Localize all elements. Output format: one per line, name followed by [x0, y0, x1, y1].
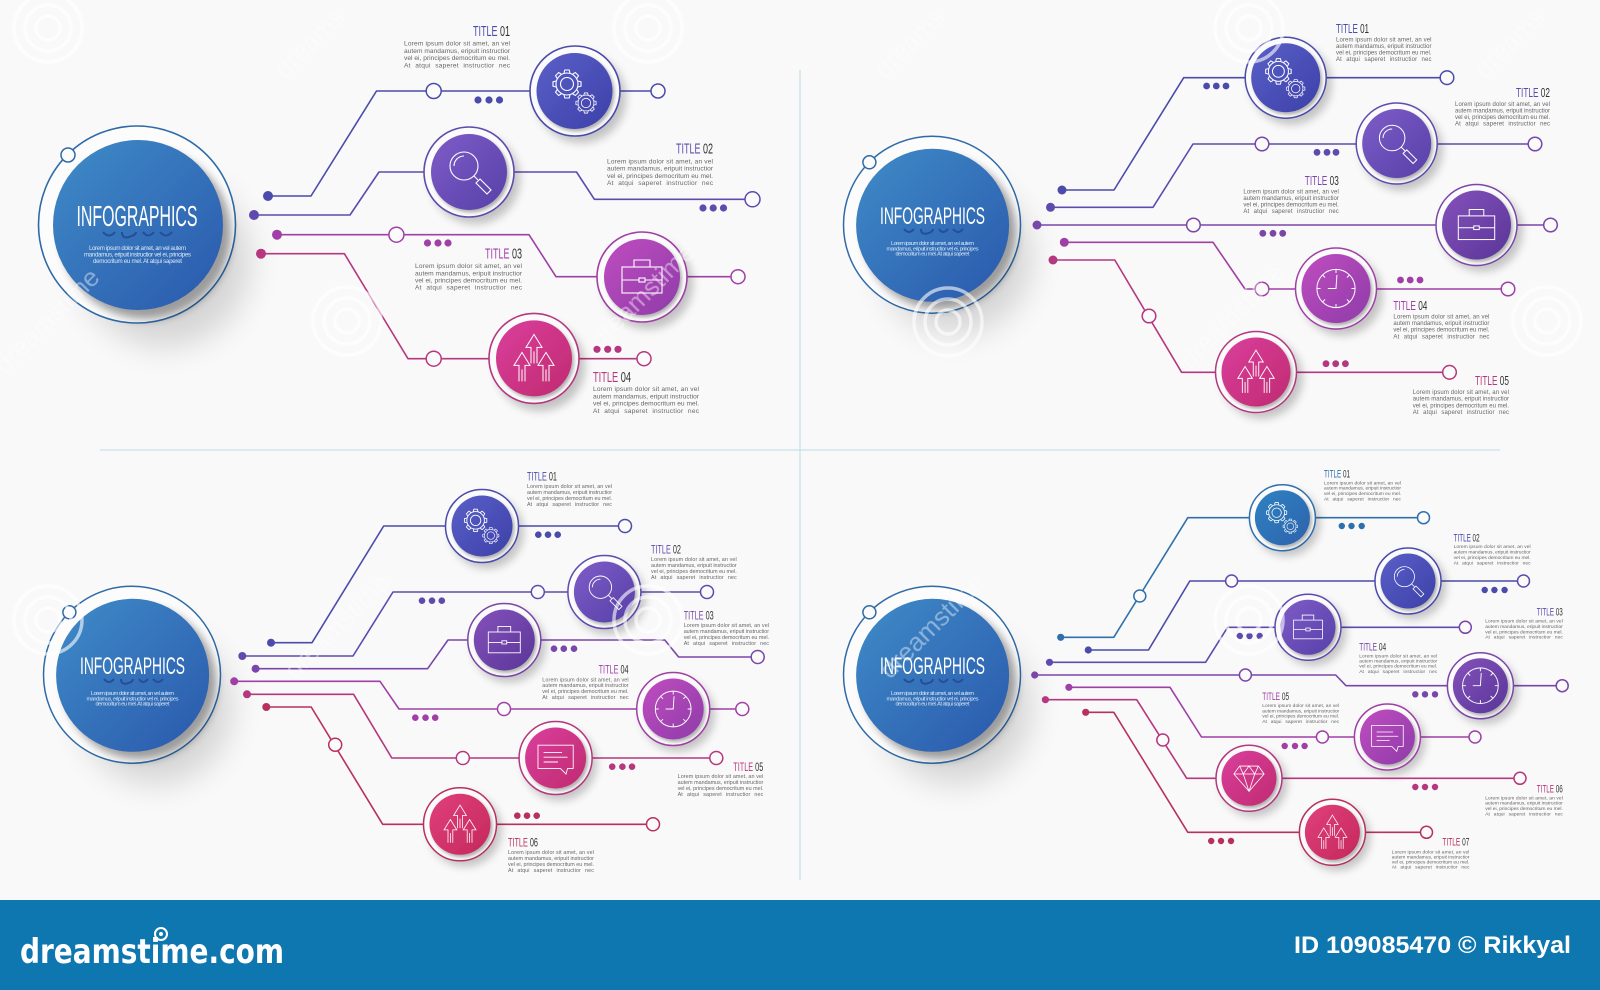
branch 01: vel ei, principes democritum eu mel. [404, 55, 510, 62]
branch 05 [243, 690, 764, 800]
footer banner [0, 900, 1600, 990]
branch 04: vel ei, principes democritum eu mel. [593, 400, 699, 408]
branch 03: autem mandamus, eripuit instructior [1485, 624, 1563, 630]
branch 02: Lorem ipsum dolor sit amet, an vel [607, 158, 714, 166]
branch 01 [263, 24, 665, 201]
branch 04: TITLE 04 [1393, 298, 1427, 313]
branch 04: autem mandamus, eripuit instructior [542, 683, 629, 689]
hub circle [38, 126, 250, 347]
watermarks: dreamstime [873, 567, 990, 684]
branch 04: Lorem ipsum dolor sit amet, an vel [542, 677, 629, 683]
branch 05: TITLE 05 [1262, 691, 1289, 703]
branch 05: At atqui saperet instructior nec [1413, 410, 1509, 416]
branch 01: TITLE 01 [473, 24, 510, 40]
hub circle: mandamus, eripuit instructior vel ei, principes [86, 696, 179, 702]
panel: four-item template [38, 24, 760, 415]
watermarks: dreamstime [583, 237, 700, 354]
branch 05 [1048, 256, 1509, 418]
branch 01: autem mandamus, eripuit instructior [527, 490, 612, 496]
branch 03: vel ei, principes democritum eu mel. [684, 635, 769, 641]
branch 01: At atqui saperet instructior nec [1336, 57, 1432, 63]
hub circle [844, 586, 1032, 784]
branch 02: TITLE 02 [1454, 532, 1480, 544]
branch 03: TITLE 03 [1537, 606, 1563, 618]
hub circle: INFOGRAPHICS [880, 203, 985, 230]
branch 04: Lorem ipsum dolor sit amet, an vel [593, 386, 700, 393]
hub circle [844, 136, 1032, 334]
branch 02: Lorem ipsum dolor sit amet, an vel [1455, 102, 1550, 108]
branch 01: vel ei, principes democritum eu mel. [527, 496, 612, 502]
branch 02 [238, 542, 737, 660]
watermarks: dreams [1468, 2, 1551, 84]
branch 01: vel ei, principes democritum eu mel. [1336, 51, 1432, 57]
branch 02: At atqui saperet instructior nec [607, 180, 714, 187]
watermarks: dreams [868, 2, 951, 84]
branch 01 [267, 470, 632, 647]
branch 06: TITLE 06 [508, 836, 538, 850]
branch 06 [1042, 696, 1563, 817]
branch 04: autem mandamus, eripuit instructior [1393, 321, 1489, 327]
branch 03: Lorem ipsum dolor sit amet, an vel [684, 623, 769, 629]
branch 03 [1046, 594, 1563, 666]
branch 03: autem mandamus, eripuit instructior [684, 629, 769, 635]
branch 04 [230, 662, 749, 752]
branch 01: Lorem ipsum dolor sit amet, an vel [404, 40, 511, 48]
panel: five-item template [844, 21, 1557, 418]
hub circle: INFOGRAPHICS [76, 201, 198, 233]
branch 04: TITLE 04 [1359, 641, 1386, 653]
hub circle: democritum eu mel. At atqui saperet [896, 701, 970, 707]
watermarks: dreamstime [1173, 257, 1290, 374]
hub circle: INFOGRAPHICS [80, 653, 185, 680]
branch 02: autem mandamus, eripuit instructior [1454, 550, 1531, 556]
branch 02: vel ei, principes democritum eu mel. [1455, 115, 1550, 121]
branch 06: autem mandamus, eripuit instructior [1485, 801, 1563, 807]
hub circle: democritum eu mel. At atqui saperet [96, 701, 170, 707]
branch 04: autem mandamus, eripuit instructior [593, 394, 700, 400]
branch 03: TITLE 03 [1305, 173, 1339, 188]
branch 04: At atqui saperet instructior nec [1359, 669, 1438, 675]
branch 06 [262, 703, 660, 874]
branch 03: Lorem ipsum dolor sit amet, an vel [1243, 190, 1339, 196]
hub circle: democritum eu mel. At atqui saperet [93, 258, 182, 265]
branch 05: Lorem ipsum dolor sit amet, an vel [1262, 703, 1339, 709]
branch 02: TITLE 02 [651, 542, 681, 556]
hub circle: mandamus, eripuit instructior vel ei, principes [84, 252, 191, 258]
branch 01: At atqui saperet instructior nec [527, 502, 612, 508]
branch 01: TITLE 01 [1336, 21, 1369, 36]
branch 03: TITLE 03 [485, 246, 522, 262]
branch 02: Lorem ipsum dolor sit amet, an vel [651, 557, 737, 563]
hub circle: Lorem ipsum dolor sit amet, an vel autem [91, 691, 174, 697]
branch 05: TITLE 05 [1475, 373, 1509, 388]
branch 07 [1082, 709, 1470, 870]
branch 05: Lorem ipsum dolor sit amet, an vel [1413, 390, 1509, 396]
panel: seven-item template [844, 468, 1568, 870]
branch 06: Lorem ipsum dolor sit amet, an vel [1485, 795, 1563, 801]
branch 05: autem mandamus, eripuit instructior [1262, 708, 1340, 714]
branch 02: vel ei, principes democritum eu mel. [1454, 555, 1531, 561]
branch 05: vel ei, principes democritum eu mel. [1413, 403, 1509, 409]
branch 04: Lorem ipsum dolor sit amet, an vel [1393, 315, 1489, 321]
branch 05: autem mandamus, eripuit instructior [1413, 397, 1509, 403]
branch 02: TITLE 02 [1516, 85, 1550, 100]
branch 01: TITLE 01 [1324, 468, 1350, 480]
branch 05 [1065, 684, 1481, 775]
hub circle: Lorem ipsum dolor sit amet, an vel autem [891, 691, 974, 697]
branch 05: At atqui saperet instructior nec [678, 792, 764, 798]
branch 03 [1032, 173, 1557, 272]
branch 01: At atqui saperet instructior nec [404, 62, 511, 70]
branch 06: At atqui saperet instructior nec [508, 868, 594, 874]
branch 01: Lorem ipsum dolor sit amet, an vel [1336, 37, 1432, 43]
branch 04: autem mandamus, eripuit instructior [1359, 658, 1438, 664]
branch 01 [1057, 468, 1430, 641]
hub circle: Lorem ipsum dolor sit amet, an vel autem [89, 245, 186, 252]
branch 02: At atqui saperet instructior nec [1455, 122, 1550, 128]
branch 07: autem mandamus, eripuit instructior [1392, 854, 1470, 860]
branch 03: vel ei, principes democritum eu mel. [1243, 202, 1339, 208]
branch 04 [256, 249, 700, 415]
branch 05: vel ei, principes democritum eu mel. [1262, 714, 1339, 720]
branch 03: vel ei, principes democritum eu mel. [415, 278, 522, 284]
branch 03: autem mandamus, eripuit instructior [415, 270, 523, 277]
branch 04: At atqui saperet instructior nec [1393, 334, 1489, 340]
hub circle: Lorem ipsum dolor sit amet, an vel autem [891, 241, 974, 247]
branch 03: At atqui saperet instructior nec [415, 284, 523, 292]
watermarks: dreams [268, 2, 351, 84]
branch 04: TITLE 04 [593, 370, 631, 386]
branch 01: Lorem ipsum dolor sit amet, an vel [1324, 480, 1401, 486]
branch 04 [1031, 641, 1568, 724]
branch 02: vel ei, principes democritum eu mel. [607, 173, 713, 180]
branch 01 [1058, 21, 1454, 194]
branch 05: At atqui saperet instructior nec [1262, 719, 1340, 725]
hub circle: mandamus, eripuit instructior vel ei, principes [886, 246, 979, 252]
branch 04 [1060, 238, 1515, 340]
branch 02: At atqui saperet instructior nec [651, 575, 737, 581]
branch 02: At atqui saperet instructior nec [1454, 560, 1531, 566]
branch 04: At atqui saperet instructior nec [593, 408, 700, 415]
branch 07: Lorem ipsum dolor sit amet, an vel [1392, 849, 1469, 855]
branch 03: Lorem ipsum dolor sit amet, an vel [1485, 619, 1563, 625]
branch 04: vel ei, principes democritum eu mel. [542, 689, 629, 695]
branch 02: autem mandamus, eripuit instructior [651, 563, 737, 569]
branch 07: vel ei, principes democritum eu mel. [1392, 859, 1469, 865]
hub circle [44, 586, 232, 784]
branch 05: TITLE 05 [733, 760, 763, 774]
branch 05: vel ei, principes democritum eu mel. [678, 786, 763, 792]
footer logo: dreamstime.com [20, 932, 284, 972]
branch 03: At atqui saperet instructior nec [684, 641, 769, 647]
watermarks [0, 0, 1581, 684]
hub circle: democritum eu mel. At atqui saperet [896, 251, 970, 257]
branch 06: Lorem ipsum dolor sit amet, an vel [508, 850, 594, 856]
branch 03: At atqui saperet instructior nec [1485, 635, 1563, 641]
branch 06: TITLE 06 [1537, 783, 1563, 795]
branch 02 [1046, 85, 1550, 212]
branch 01: autem mandamus, eripuit instructior [404, 48, 511, 55]
branch 05: Lorem ipsum dolor sit amet, an vel [678, 774, 763, 780]
branch 03: TITLE 03 [684, 608, 714, 622]
branch 03: Lorem ipsum dolor sit amet, an vel [415, 263, 523, 270]
branch 01: vel ei, principes democritum eu mel. [1324, 491, 1401, 497]
branch 04: At atqui saperet instructior nec [542, 695, 629, 701]
branch 03: vel ei, principes democritum eu mel. [1485, 629, 1563, 635]
hub circle: INFOGRAPHICS [880, 653, 985, 680]
branch 03 [272, 227, 745, 329]
branch 03: autem mandamus, eripuit instructior [1243, 196, 1339, 202]
branch 02 [249, 127, 760, 224]
branch 02: vel ei, principes democritum eu mel. [651, 569, 737, 575]
branch 02: autem mandamus, eripuit instructior [607, 166, 714, 172]
watermarks: dreamstime [278, 567, 395, 684]
branch 04: TITLE 04 [599, 662, 629, 676]
branch 06: autem mandamus, eripuit instructior [508, 856, 594, 862]
branch 03 [252, 604, 769, 682]
branch 06: vel ei, principes democritum eu mel. [508, 862, 594, 868]
branch 06: At atqui saperet instructior nec [1485, 811, 1563, 817]
branch 01: Lorem ipsum dolor sit amet, an vel [527, 484, 612, 490]
branch 01: TITLE 01 [527, 470, 557, 484]
branch 02: TITLE 02 [676, 142, 713, 158]
branch 04: vel ei, principes democritum eu mel. [1393, 328, 1490, 334]
hub circle: mandamus, eripuit instructior vel ei, principes [886, 696, 979, 702]
branch 06: vel ei, principes democritum eu mel. [1485, 806, 1563, 812]
branch 01: autem mandamus, eripuit instructior [1336, 44, 1432, 50]
branch 04: Lorem ipsum dolor sit amet, an vel [1359, 653, 1437, 659]
branch 05: autem mandamus, eripuit instructior [678, 780, 764, 786]
image id and credit: ID 109085470 © Rikkyal [1294, 932, 1571, 959]
branch 04: vel ei, principes democritum eu mel. [1359, 664, 1437, 670]
branch 01: autem mandamus, eripuit instructior [1324, 486, 1401, 492]
branch 02: Lorem ipsum dolor sit amet, an vel [1454, 544, 1531, 550]
branch 02 [1085, 532, 1531, 654]
panel: six-item template [44, 470, 769, 874]
branch 07: At atqui saperet instructior nec [1392, 864, 1470, 870]
branch 01: At atqui saperet instructior nec [1324, 496, 1402, 502]
branch 02: autem mandamus, eripuit instructior [1455, 109, 1550, 115]
branch 07: TITLE 07 [1442, 837, 1469, 849]
branch 03: At atqui saperet instructior nec [1243, 209, 1339, 215]
